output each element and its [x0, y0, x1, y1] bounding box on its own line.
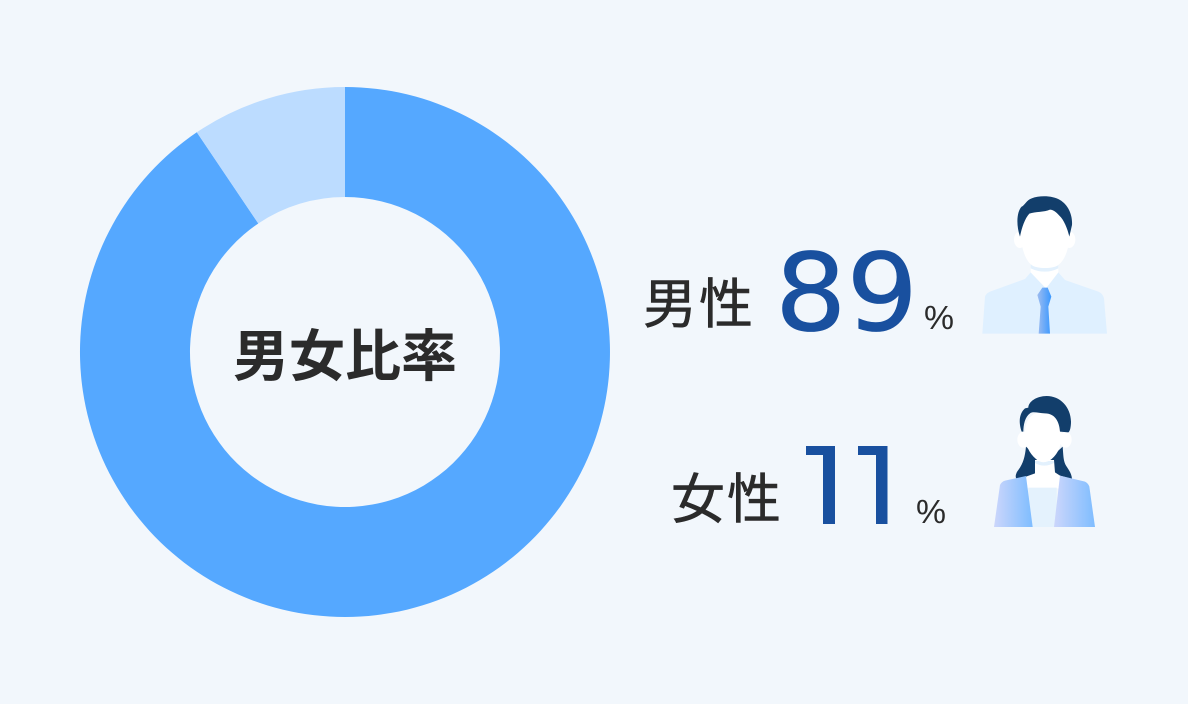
icon: businessman [982, 196, 1107, 334]
chart title: 男女比率 [233, 325, 457, 388]
donut chart [80, 87, 610, 617]
male percent sign: % [924, 299, 954, 336]
female value [806, 446, 888, 524]
male label: 男性 [643, 275, 755, 335]
icon: businesswoman [994, 396, 1095, 527]
female label: 女性 [671, 470, 783, 530]
segment: female 11% [197, 87, 345, 224]
male value: 89 [775, 232, 918, 356]
female percent sign: % [916, 493, 946, 530]
digits: 11 [797, 400, 909, 556]
segment: male 89% [80, 87, 610, 617]
digit flags [806, 446, 888, 455]
infographic: gender ratio [80, 87, 1107, 617]
